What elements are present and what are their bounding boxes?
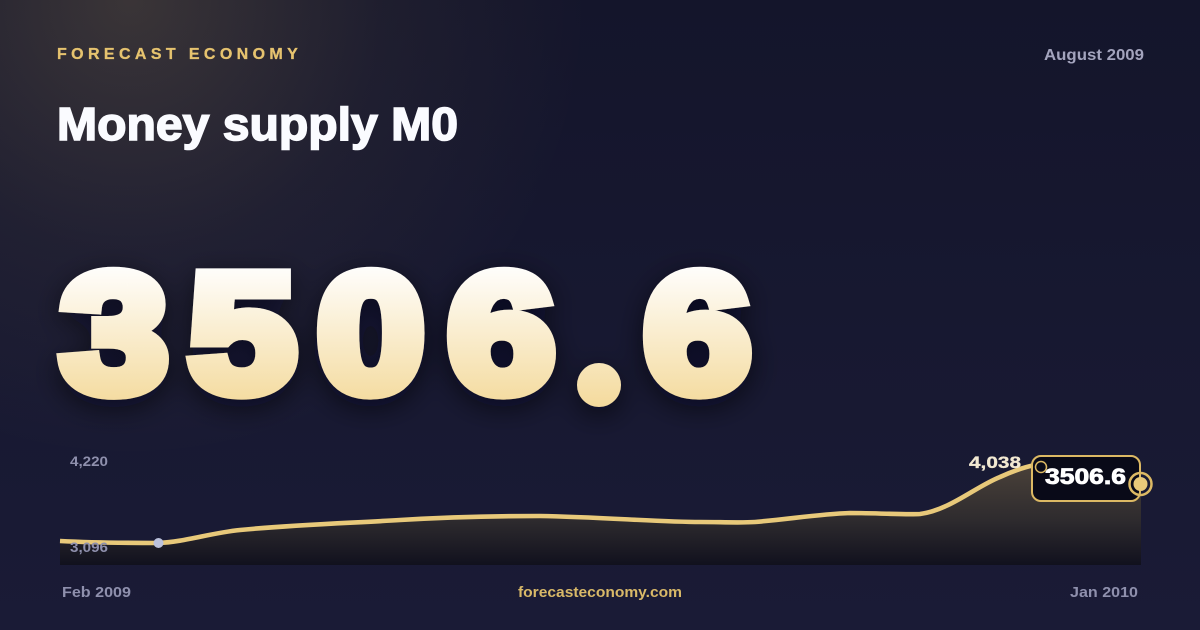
headline value: 6 <box>644 240 751 427</box>
axis max label: 4,220 <box>70 453 108 469</box>
headline value: 3506 <box>61 240 555 427</box>
area under line <box>60 465 1141 565</box>
trend line <box>60 465 1035 543</box>
low marker <box>154 538 164 548</box>
current marker <box>1130 473 1152 495</box>
brand label: FORECAST ECONOMY <box>57 46 302 63</box>
current value callout <box>1032 456 1140 501</box>
axis min label: 3,096 <box>70 539 108 555</box>
peak marker <box>1036 462 1046 472</box>
high value label: 4,038 <box>969 453 1021 472</box>
date label: August 2009 <box>1044 47 1144 64</box>
title: Money supply M0 <box>57 98 458 150</box>
start date: Feb 2009 <box>62 584 131 601</box>
chart: money supply line <box>60 453 1152 565</box>
headline value: . <box>575 256 623 424</box>
source website: forecasteconomy.com <box>518 584 682 601</box>
end date: Jan 2010 <box>1070 584 1138 601</box>
current value callout: 3506.6 <box>1045 464 1126 489</box>
